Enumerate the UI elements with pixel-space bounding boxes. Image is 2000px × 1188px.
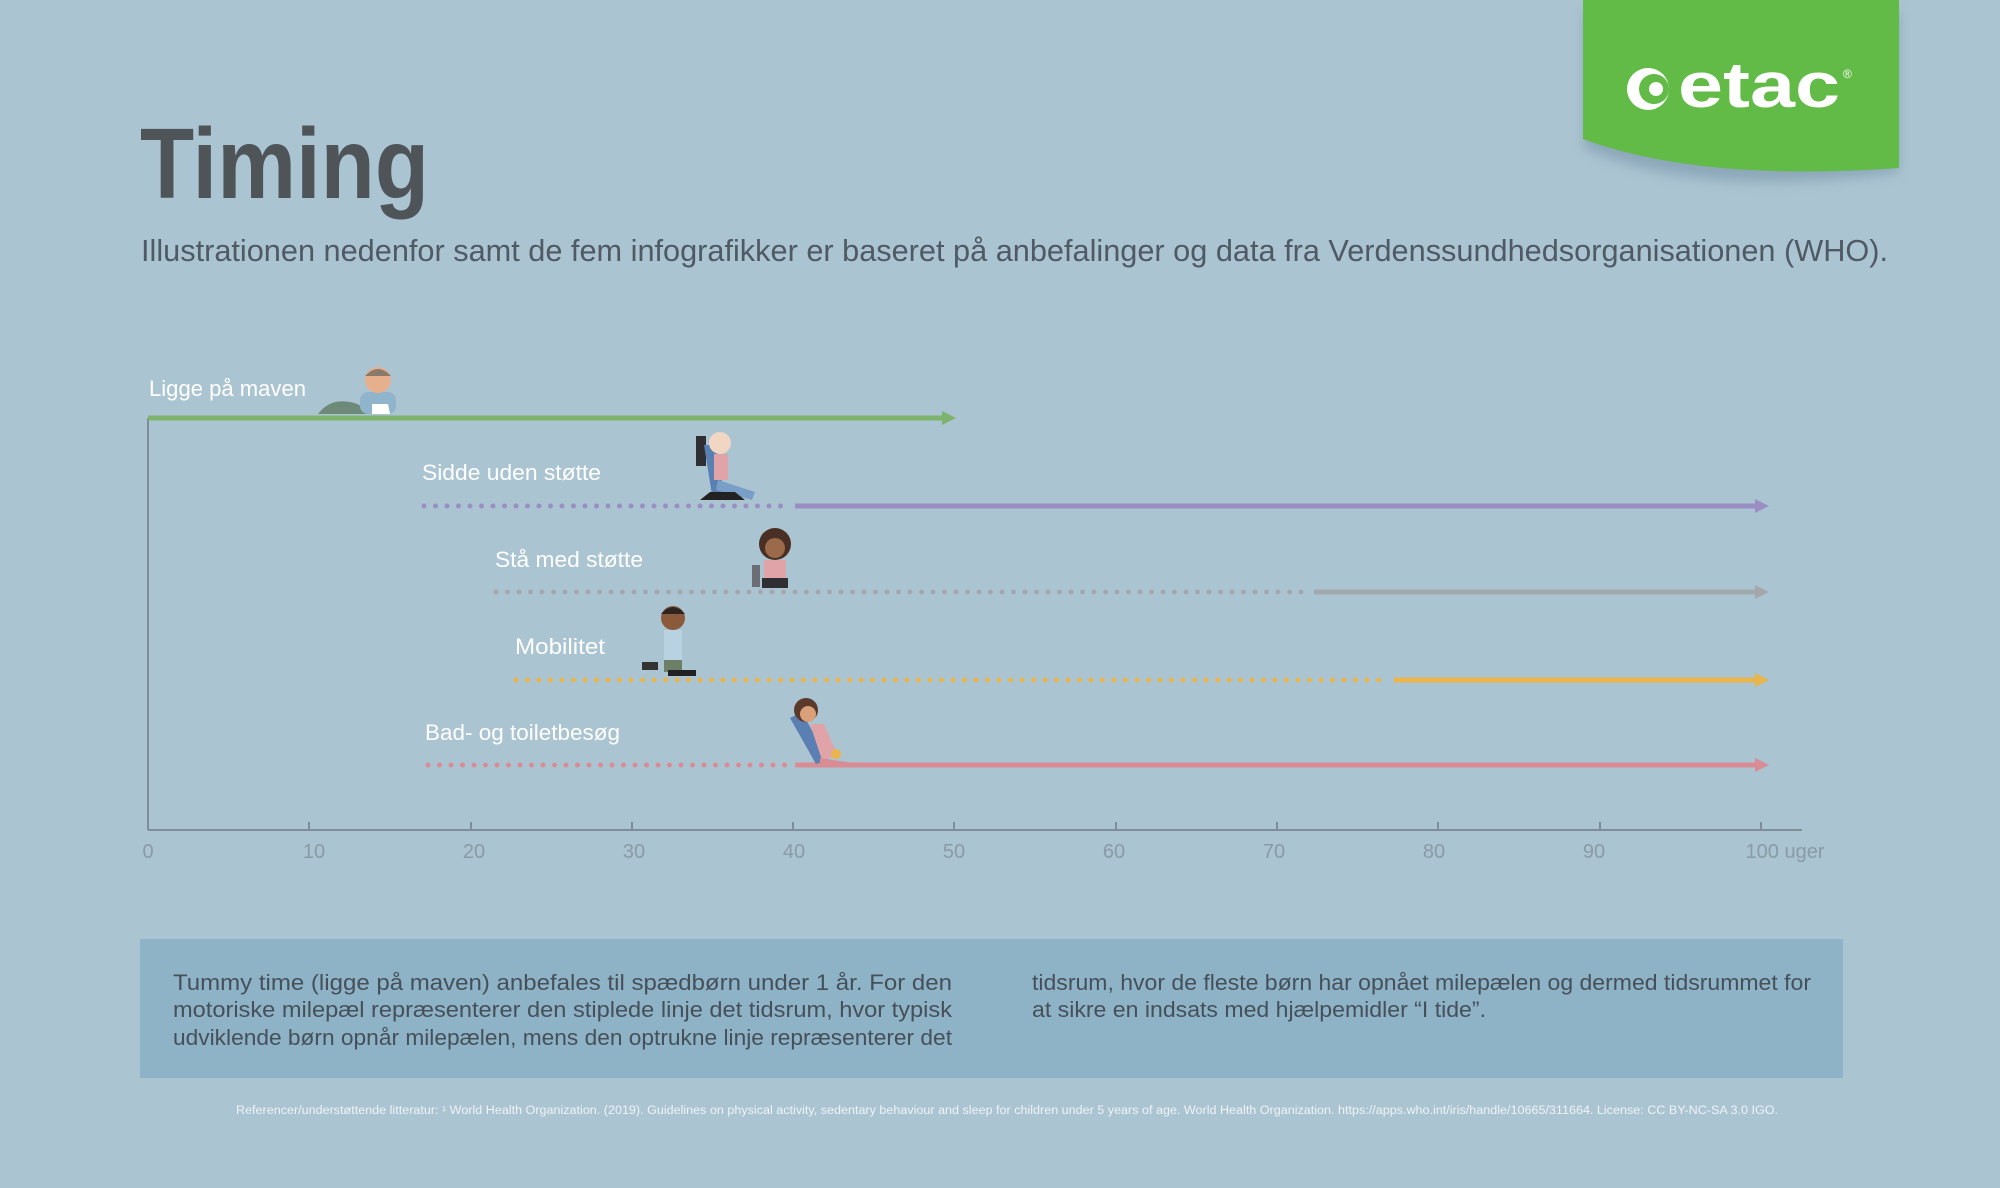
row: Sidde uden støtte	[422, 432, 1769, 513]
title: Timing	[140, 108, 429, 220]
row: Stå med støtte: Stå med støtte	[495, 547, 643, 572]
logo: etac: ®	[1843, 67, 1852, 81]
axis labels: 30	[623, 841, 645, 863]
text: left column: udviklende børn opnår milepælen, mens den optrukne linje repræsenterer det	[173, 1025, 952, 1050]
logo: etac: etac	[1678, 49, 1840, 121]
axis labels: 90	[1583, 841, 1605, 863]
logo: etac	[1580, 0, 1903, 186]
axis labels: 100 uger	[1746, 841, 1825, 863]
axis labels: 60	[1103, 841, 1125, 863]
axis labels: 20	[463, 841, 485, 863]
axis labels: 0	[142, 841, 154, 863]
icon: child in seat	[696, 432, 755, 500]
axis labels	[142, 841, 1825, 863]
icon: baby on tummy	[318, 367, 396, 414]
text: left column	[173, 970, 953, 1050]
row: Sidde uden støtte: Sidde uden støtte	[422, 460, 601, 485]
axis labels: 40	[783, 841, 805, 863]
row: Mobilitet: Mobilitet	[515, 634, 605, 659]
icon: child in bath seat	[790, 698, 860, 766]
row: Mobilitet	[515, 606, 1769, 687]
info box	[140, 939, 1843, 1078]
title and subtitle	[140, 108, 1888, 268]
axis labels: 80	[1423, 841, 1445, 863]
chart: milestone timeline	[142, 367, 1825, 863]
row: Bad- og toiletbesøg	[425, 698, 1769, 772]
text: right column: tidsrum, hvor de fleste børn har opnået milepælen og dermed tidsrummet for	[1032, 970, 1811, 995]
axes	[148, 418, 1802, 830]
row: Stå med støtte	[495, 528, 1769, 599]
row: Bad- og toiletbesøg: Bad- og toiletbesøg	[425, 720, 620, 745]
icon: child with walker	[642, 606, 696, 676]
axis labels: 10	[303, 841, 325, 863]
text: left column: motoriske milepæl repræsenterer den stiplede linje det tidsrum, hvor typisk	[173, 997, 953, 1022]
axis labels: 70	[1263, 841, 1285, 863]
text: right column	[1032, 970, 1811, 1022]
subtitle: Illustrationen nedenfor samt de fem infografikker er baseret på anbefalinger og data fra Verdenssundhedsorganisationen (WHO).	[141, 233, 1888, 268]
row: Ligge på maven: Ligge på maven	[149, 376, 306, 401]
axis labels: 50	[943, 841, 965, 863]
row: Ligge på maven	[148, 367, 956, 425]
text: right column: at sikre en indsats med hjælpemidler “I tide”.	[1032, 997, 1486, 1022]
icon: standing child	[752, 528, 791, 588]
text: left column: Tummy time (ligge på maven) anbefales til spædbørn under 1 år. For den	[173, 970, 952, 995]
references: Referencer/understøttende litteratur: ¹ World Health Organization. (2019). Guidelines on physical activity, sedentary behaviour and sleep for children under 5 years of age. World Health Organization. https://apps.who.int/iris/handle/10665/311664. License: CC BY-NC-SA 3.0 IGO.	[236, 1105, 1778, 1117]
